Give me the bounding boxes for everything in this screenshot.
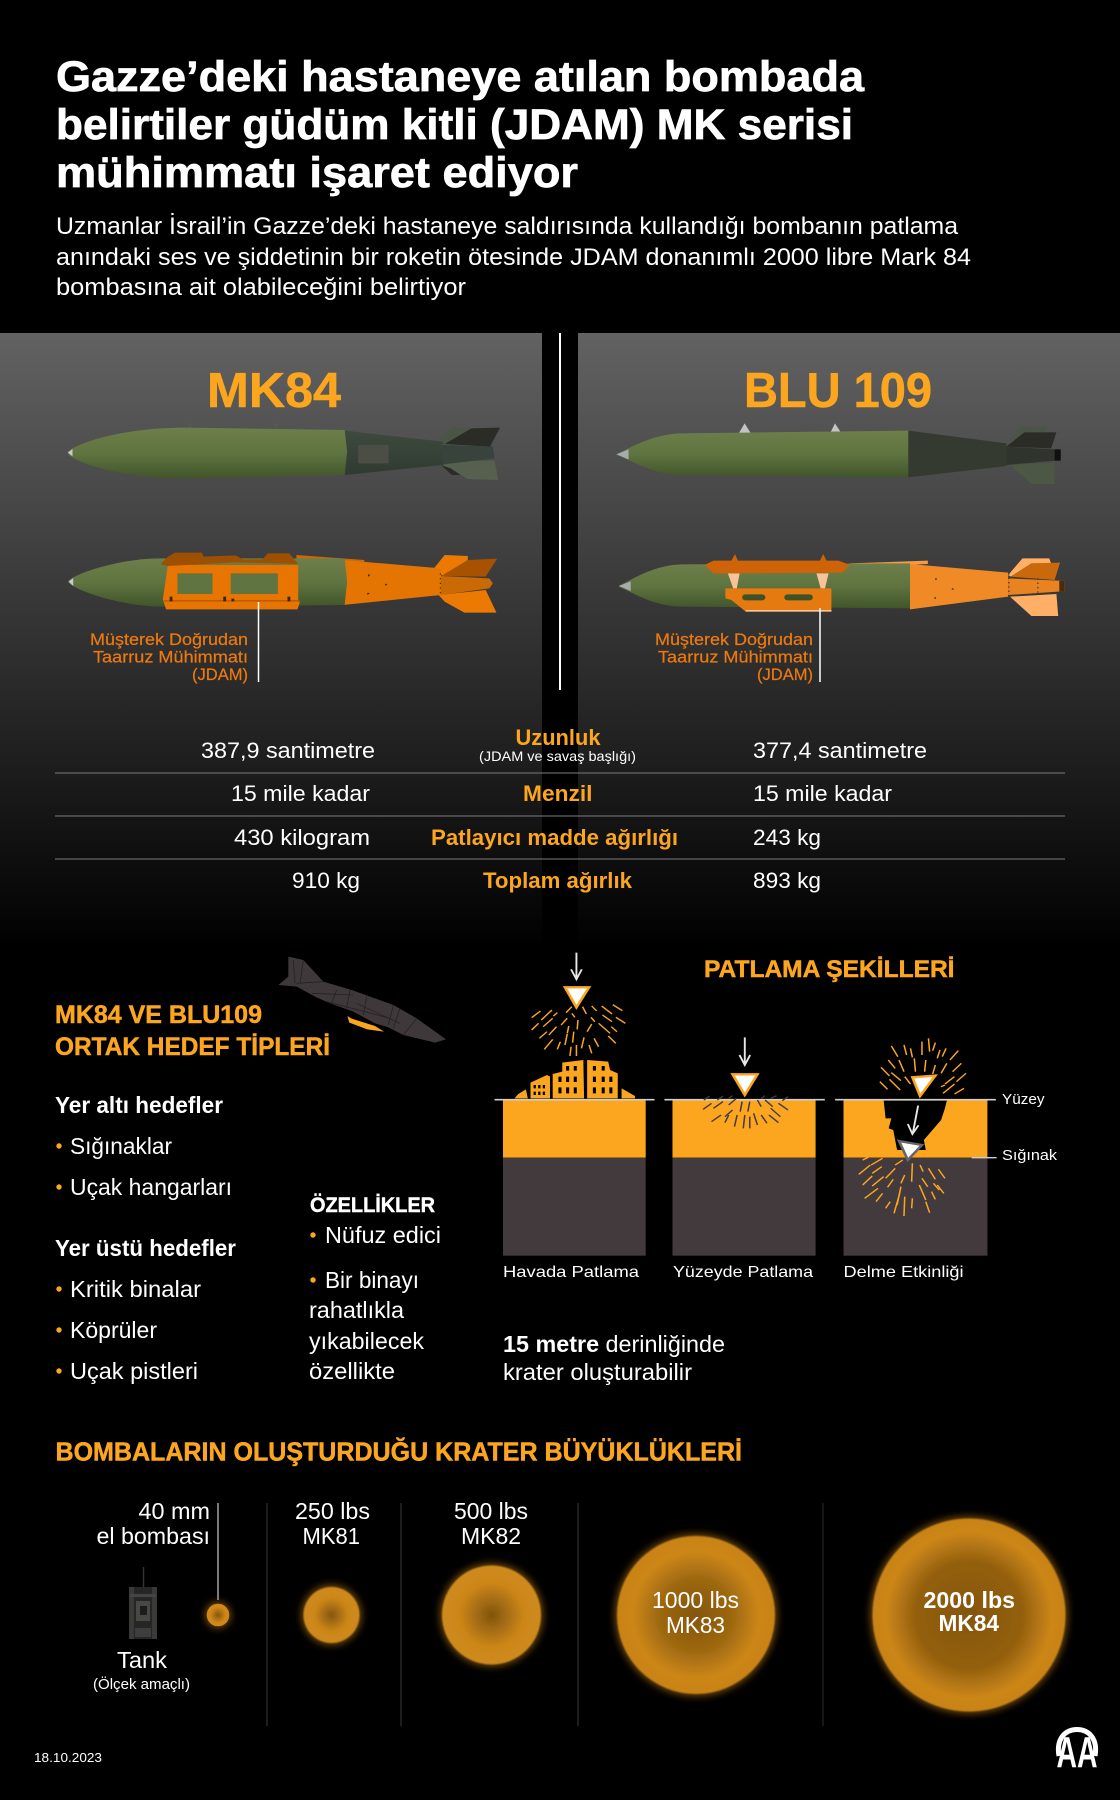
title: [56, 53, 865, 197]
diagram: penetration: [835, 1038, 997, 1256]
bomb: BLU 109 with JDAM kit: [619, 554, 1064, 616]
tank label: (Ölçek amaçlı): [93, 1675, 190, 1693]
crater: MK84: [870, 1516, 1068, 1714]
row: range: Menzil: [523, 781, 592, 806]
crater: 40 mm grenade: 40 mm: [138, 1498, 210, 1524]
list: features: rahatlıkla: [309, 1297, 404, 1323]
list: features: özellikte: [309, 1358, 395, 1384]
crater: MK82: 500 lbs: [454, 1498, 528, 1524]
list: features: yıkabilecek: [309, 1328, 424, 1354]
row: range: [231, 781, 892, 806]
crater: 40 mm grenade: [96, 1498, 231, 1628]
heading: BLU 109: BLU 109: [744, 364, 932, 418]
crater: 40 mm grenade: el bombası: [96, 1523, 210, 1549]
title: belirtiler güdüm kitli (JDAM) MK serisi: [56, 101, 853, 149]
JDAM label: [90, 630, 248, 684]
panel: BLU 109: [578, 333, 1120, 950]
JDAM label: (JDAM): [192, 665, 248, 684]
list: underground targets: Uçak hangarları: [70, 1174, 232, 1200]
list: surface targets: Yer üstü hedefler: [55, 1235, 236, 1261]
tank label: Tank: [117, 1647, 168, 1673]
subtitle: anındaki ses ve şiddetinin bir roketin ötesinde JDAM donanımlı 2000 libre Mark 84: [56, 244, 971, 271]
subtitle: bombasına ait olabileceğini belirtiyor: [56, 274, 466, 301]
row: length: 387,9 santimetre: [201, 738, 375, 763]
blast type labels: Havada Patlama: [503, 1264, 639, 1281]
heading: blast types: PATLAMA ŞEKİLLERİ: [704, 956, 954, 983]
icon: shrapnel burst below: [859, 1157, 945, 1216]
subtitle: Uzmanlar İsrail’in Gazze’deki hastaneye saldırısında kullandığı bombanın patlama: [56, 213, 959, 240]
row: total weight: 910 kg: [292, 868, 360, 893]
list: underground targets: Yer altı hedefler: [55, 1092, 223, 1118]
note: crater depth: [503, 1331, 725, 1385]
blast type labels: Yüzeyde Patlama: [673, 1264, 813, 1281]
icon: shrapnel burst above: [880, 1038, 966, 1094]
list: surface targets: [55, 1235, 236, 1384]
row: total weight: Toplam ağırlık: [483, 868, 633, 893]
chart: blast types diagram: [495, 953, 1058, 1281]
icon: tank for scale: [129, 1567, 157, 1639]
row: total weight: [292, 868, 821, 893]
crater: MK84: 2000 lbs: [924, 1587, 1015, 1613]
heading: target types: MK84 VE BLU109: [55, 1001, 262, 1029]
heading: crater sizes: BOMBALARIN OLUŞTURDUĞU KRATER BÜYÜKLÜKLERİ: [56, 1436, 742, 1466]
JDAM label: Taarruz Mühimmatı: [93, 648, 248, 666]
crater: MK83: [615, 1534, 777, 1696]
comparison table: [55, 725, 1065, 893]
blast type labels: Delme Etkinliği: [844, 1264, 964, 1281]
heading: target types: ORTAK HEDEF TİPLERİ: [55, 1033, 330, 1061]
JDAM label: Taarruz Mühimmatı: [658, 648, 813, 666]
crater: MK81: 250 lbs: [295, 1498, 370, 1524]
crater: MK83: 1000 lbs: [652, 1587, 739, 1613]
crater: MK84: MK84: [938, 1610, 999, 1636]
list: features: Nüfuz edici: [325, 1222, 441, 1248]
icon: bomb in bunker: [899, 1141, 922, 1160]
note: crater depth: krater oluşturabilir: [503, 1359, 692, 1385]
list: underground targets: [55, 1092, 232, 1200]
icon: arrow and bomb: [565, 953, 589, 1007]
JDAM label: [655, 630, 813, 684]
icon: arrow and bomb: [733, 1037, 757, 1095]
diagram: surface burst: [664, 1037, 825, 1256]
list: features: [309, 1194, 441, 1384]
heading: target types: [55, 1001, 330, 1061]
tank label: [93, 1647, 190, 1693]
icon: fighter jet with bomb: [278, 957, 446, 1043]
row: total weight: 893 kg: [753, 868, 821, 893]
row: explosive weight: Patlayıcı madde ağırlığı: [431, 825, 678, 850]
row: range: 15 mile kadar: [753, 781, 892, 806]
blast type labels: Sığınak: [1002, 1147, 1058, 1164]
note: crater depth: 15 metre derinliğinde: [503, 1331, 725, 1357]
row: explosive weight: 243 kg: [753, 825, 821, 850]
row: length: Uzunluk: [516, 725, 601, 750]
list: surface targets: Uçak pistleri: [70, 1358, 198, 1384]
icon: shrapnel burst: [703, 1096, 788, 1128]
list: surface targets: Köprüler: [70, 1317, 157, 1343]
row: explosive weight: 430 kilogram: [234, 825, 370, 850]
list: surface targets: Kritik binalar: [70, 1276, 201, 1302]
blast type labels: [503, 1091, 1058, 1281]
logo: AA: [1056, 1728, 1098, 1777]
subtitle: [56, 213, 971, 301]
crater: MK81: MK81: [302, 1523, 360, 1549]
icon: shrapnel burst: [532, 1005, 625, 1056]
bomb: MK84 plain: [68, 422, 500, 480]
bomb: MK84 with JDAM kit: [69, 553, 497, 613]
crater: MK82: [440, 1498, 543, 1666]
date: 18.10.2023: [34, 1750, 102, 1765]
list: features: Bir binayı: [325, 1267, 419, 1293]
title: Gazze’deki hastaneye atılan bombada: [56, 53, 865, 101]
icon: bomb at surface: [912, 1076, 935, 1096]
row: length: 377,4 santimetre: [753, 738, 927, 763]
list: features: ÖZELLİKLER: [310, 1194, 435, 1217]
JDAM label: Müşterek Doğrudan: [90, 630, 248, 649]
crater: MK82: MK82: [461, 1523, 521, 1549]
bomb: BLU 109 plain: [616, 423, 1061, 484]
diagram: air burst: [495, 953, 654, 1256]
list: underground targets: Sığınaklar: [70, 1133, 172, 1159]
logo: AA: AA: [1056, 1728, 1098, 1777]
icon: arrow in crater: [908, 1106, 919, 1134]
JDAM label: Müşterek Doğrudan: [655, 630, 813, 649]
blast type labels: Yüzey: [1002, 1091, 1045, 1108]
title: mühimmatı işaret ediyor: [56, 149, 578, 197]
panel: MK84: [0, 333, 542, 950]
row: range: 15 mile kadar: [231, 781, 370, 806]
JDAM label: (JDAM): [757, 665, 813, 684]
row: length: (JDAM ve savaş başlığı): [479, 748, 636, 764]
row: length: [201, 725, 927, 764]
crater: MK81: [295, 1498, 370, 1645]
heading: MK84: MK84: [207, 364, 341, 418]
crater: MK83: MK83: [666, 1612, 725, 1638]
row: explosive weight: [234, 825, 821, 850]
